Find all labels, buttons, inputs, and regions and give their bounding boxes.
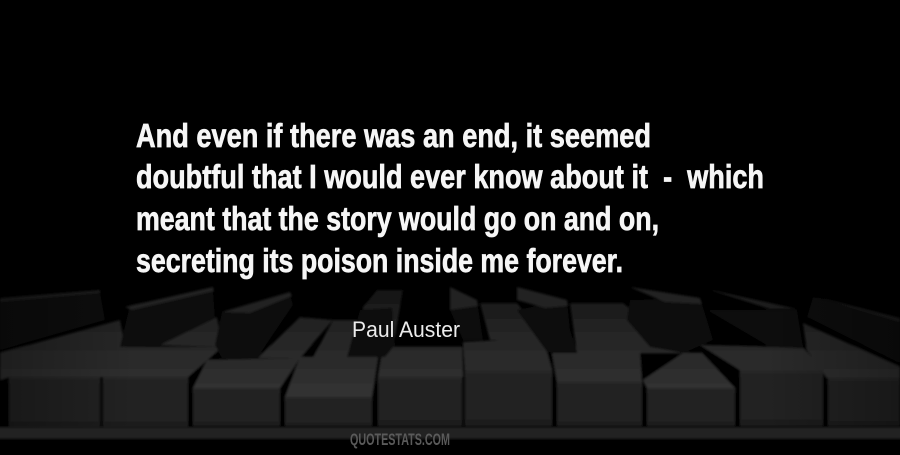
keyboard base strip — [0, 427, 900, 439]
quote text: secreting its poison inside me forever. — [136, 242, 623, 279]
black keys — [0, 290, 900, 363]
watermark: QUOTESTATS.COM — [350, 430, 450, 449]
gaps behind keys — [0, 345, 900, 429]
side vignette — [0, 285, 900, 430]
quote text: doubtful that I would ever know about it - which — [136, 158, 764, 195]
black key top ridges — [125, 287, 702, 313]
quote text: And even if there was an end, it seemed — [136, 117, 651, 154]
piano keyboard photo — [0, 285, 900, 439]
author: Paul Auster — [352, 317, 460, 342]
white key top surfaces — [0, 290, 900, 397]
quote text: meant that the story would go on and on, — [136, 200, 659, 237]
quote text — [136, 117, 764, 279]
key fronts — [9, 370, 900, 427]
